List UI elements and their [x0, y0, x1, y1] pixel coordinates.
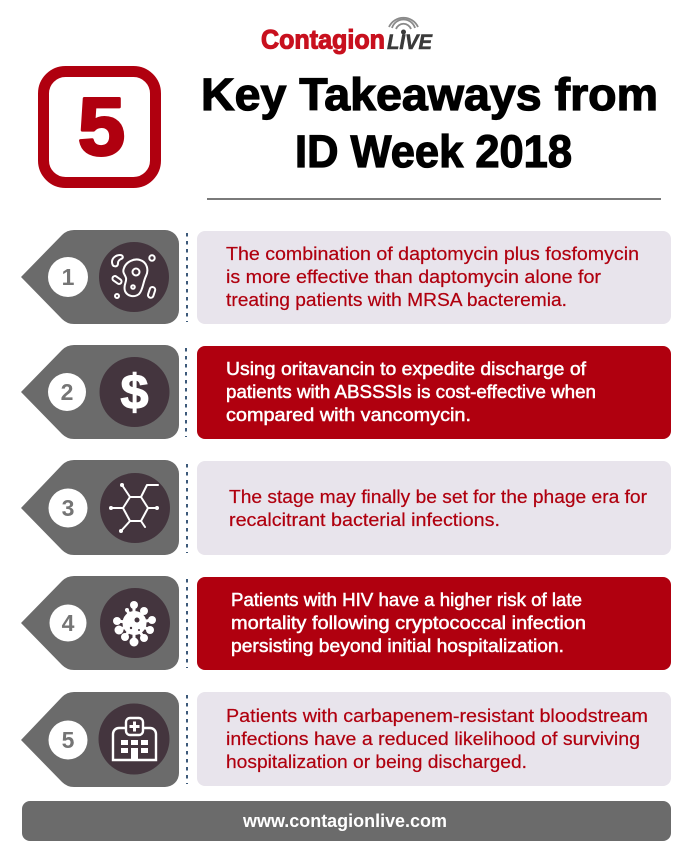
- logo: Contagion Live: Contagion: [261, 24, 385, 54]
- takeaway 4: [21, 576, 671, 670]
- icon: molecule: [100, 473, 170, 543]
- panel: takeaway text 1: [197, 231, 671, 324]
- panel: takeaway text 5: hospitalization or being discharged.: [226, 752, 527, 772]
- panel: takeaway text 1: is more effective than daptomycin alone for: [226, 267, 601, 287]
- tag: number 4: 4: [62, 610, 75, 636]
- panel: takeaway text 2: patients with ABSSSIs is cost-effective when: [226, 382, 596, 402]
- number badge: 5: [44, 72, 156, 182]
- tag: number 4: [21, 576, 179, 670]
- tag: number 3: 3: [62, 495, 74, 521]
- panel: takeaway text 4: [197, 577, 671, 670]
- footer: website bar: www.contagionlive.com: [242, 811, 447, 831]
- tag: number 3: [21, 460, 179, 555]
- panel: takeaway text 4: persisting beyond initial hospitalization.: [231, 636, 564, 656]
- title: [201, 69, 658, 177]
- tag: number 1: [21, 230, 179, 324]
- icon: virus: [100, 588, 170, 658]
- number badge: 5: 5: [78, 82, 125, 172]
- logo: Contagion Live: LIVE: [387, 31, 433, 54]
- panel: takeaway text 3: [197, 461, 671, 555]
- icon: dollar sign: [100, 357, 170, 427]
- panel: takeaway text 2: Using oritavancin to expedite discharge of: [226, 359, 587, 379]
- panel: takeaway text 1: treating patients with MRSA bacteremia.: [226, 290, 567, 310]
- panel: takeaway text 5: [197, 692, 671, 786]
- tag: number 5: 5: [62, 727, 75, 753]
- panel: takeaway text 4: mortality following cryptococcal infection: [231, 613, 586, 633]
- icon: bacteria cell: [99, 242, 169, 312]
- panel: takeaway text 2: compared with vancomycin.: [226, 405, 471, 425]
- panel: takeaway text 5: Patients with carbapenem-resistant bloodstream: [226, 706, 648, 726]
- panel: takeaway text 2: [197, 346, 671, 439]
- icon: dollar sign: $: [120, 366, 148, 420]
- takeaway 1: [21, 230, 671, 324]
- takeaway 5: [21, 692, 671, 787]
- logo: Contagion Live: [261, 18, 433, 54]
- title: ID Week 2018: [295, 126, 572, 177]
- panel: takeaway text 3: recalcitrant bacterial infections.: [229, 510, 500, 530]
- takeaway 2: [21, 345, 671, 439]
- tag: number 2: 2: [61, 379, 73, 405]
- panel: takeaway text 4: Patients with HIV have a higher risk of late: [231, 590, 582, 610]
- panel: takeaway text 1: The combination of daptomycin plus fosfomycin: [226, 244, 639, 264]
- panel: takeaway text 5: infections have a reduced likelihood of surviving: [226, 729, 640, 749]
- tag: number 2: [21, 345, 179, 439]
- icon: hospital: [98, 704, 170, 774]
- footer: website bar: [22, 801, 671, 841]
- tag: number 1: 1: [62, 264, 75, 290]
- title: Key Takeaways from: [201, 69, 658, 120]
- takeaway 3: [21, 460, 671, 555]
- tag: number 5: [21, 692, 179, 787]
- panel: takeaway text 3: The stage may finally be set for the phage era for: [229, 487, 647, 507]
